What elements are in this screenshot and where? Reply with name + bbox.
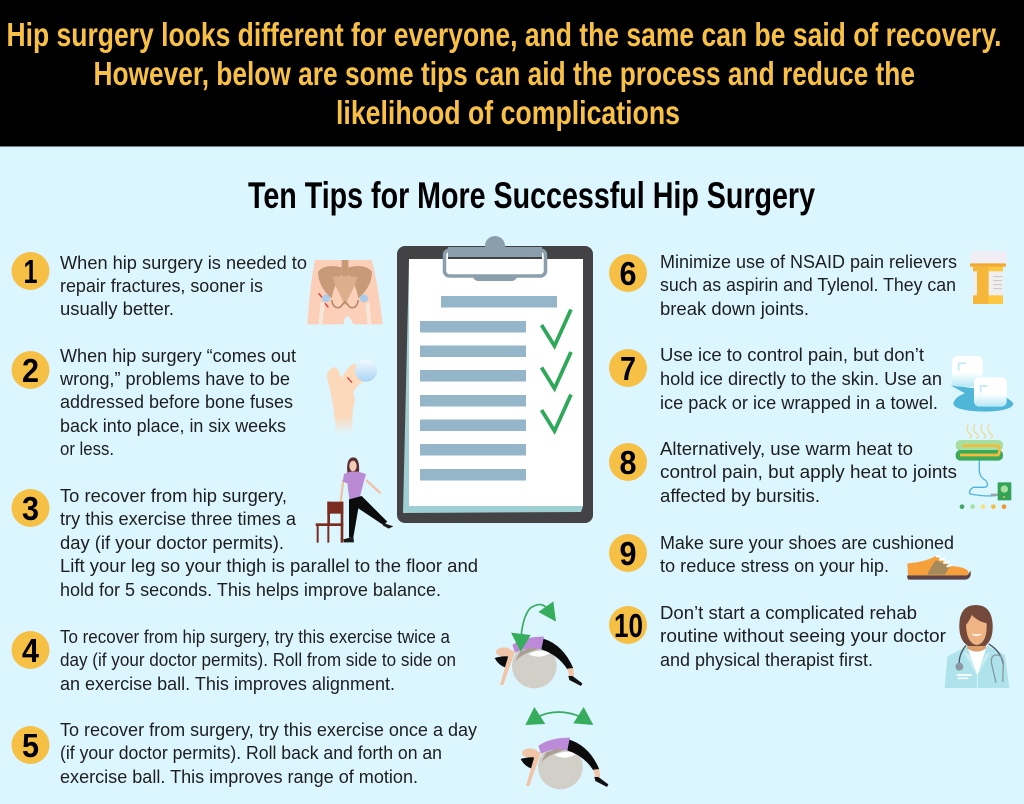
- title: Ten Tips for More Successful Hip Surgery: [248, 175, 815, 216]
- tip 4: 4: [22, 632, 40, 669]
- tip 2: or less.: [60, 439, 114, 459]
- tip 3: hold for 5 seconds. This helps improve balance.: [60, 580, 441, 600]
- icon: shoe: [907, 555, 971, 580]
- tip 2: 2: [22, 352, 39, 389]
- tip 4: [12, 627, 456, 694]
- double-headed green arrow: [525, 707, 593, 725]
- tip 5: (if your doctor permits). Roll back and forth on an: [60, 743, 442, 763]
- header banner: likelihood of complications: [336, 94, 680, 131]
- tip 8: control pain, but apply heat to joints: [660, 462, 957, 482]
- tip 1: repair fractures, sooner is: [60, 276, 263, 296]
- tip 10: routine without seeing your doctor: [660, 626, 946, 646]
- tip 2: When hip surgery “comes out: [60, 346, 296, 366]
- tip 3: Lift your leg so your thigh is parallel to the floor and: [60, 556, 478, 576]
- tip 7: 7: [620, 350, 636, 387]
- tip 4: To recover from hip surgery, try this exercise twice a: [60, 627, 451, 647]
- tip 1: When hip surgery is needed to: [60, 253, 307, 273]
- tip 4: an exercise ball. This improves alignment.: [60, 674, 395, 694]
- tip 5: To recover from surgery, try this exercise once a day: [60, 720, 477, 740]
- tip 2: addressed before bone fuses: [60, 392, 293, 412]
- tip 2: [12, 346, 296, 459]
- tip 1: usually better.: [60, 299, 174, 319]
- tip 10: and physical therapist first.: [660, 650, 873, 670]
- tip 3: try this exercise three times a: [60, 509, 297, 529]
- curved green arrow: [511, 601, 556, 652]
- tip 6: 6: [620, 255, 636, 292]
- tip 5: 5: [22, 727, 39, 764]
- tip 7: ice pack or ice wrapped in a towel.: [660, 393, 938, 413]
- icon: femur: [327, 360, 377, 434]
- tip 1: [12, 252, 307, 319]
- icon: woman with chair: [316, 457, 393, 543]
- tip 9: to reduce stress on your hip.: [660, 556, 889, 576]
- tip 9: 9: [620, 535, 636, 572]
- tip 1: 1: [24, 253, 38, 290]
- icon: heating pad: [956, 424, 1011, 509]
- tip 7: Use ice to control pain, but don’t: [660, 345, 924, 365]
- tip 8: affected by bursitis.: [660, 486, 820, 506]
- tip 10: [609, 603, 946, 670]
- tip 3: [12, 486, 478, 600]
- tip 9: Make sure your shoes are cushioned: [660, 533, 954, 553]
- icon: pill bottle: [970, 251, 1006, 304]
- tip 2: back into place, in six weeks: [60, 416, 286, 436]
- icon: doctor: [945, 605, 1009, 688]
- tip 6: Minimize use of NSAID pain relievers: [660, 252, 957, 272]
- tip 3: day (if your doctor permits).: [60, 533, 284, 553]
- tip 6: such as aspirin and Tylenol. They can: [660, 275, 956, 295]
- tip 3: 3: [22, 490, 39, 527]
- woman figure: [341, 457, 393, 542]
- icon: side-to-side exercise ball: [495, 601, 582, 688]
- clipboard illustration: [397, 236, 593, 523]
- tip 2: wrong,” problems have to be: [59, 369, 290, 389]
- tip 7: hold ice directly to the skin. Use an: [660, 369, 942, 389]
- green check marks: [542, 310, 571, 431]
- icon: ice cubes: [951, 356, 1013, 412]
- tip 10: 10: [614, 607, 643, 644]
- tip 6: break down joints.: [660, 299, 809, 319]
- tip 3: To recover from hip surgery,: [60, 486, 287, 506]
- icon: pelvis: [307, 260, 383, 324]
- tip 8: Alternatively, use warm heat to: [660, 439, 913, 459]
- header banner: [0, 0, 1024, 146]
- tip 6: [609, 252, 957, 319]
- checklist bars: [420, 296, 557, 480]
- chair: [316, 502, 343, 543]
- tip 9: [609, 533, 954, 576]
- tip 8: 8: [620, 444, 636, 481]
- tip 5: [12, 720, 477, 787]
- icon: back-and-forth exercise ball: [521, 707, 608, 789]
- tip 10: Don’t start a complicated rehab: [660, 603, 917, 623]
- tip 7: [609, 345, 942, 413]
- tip 5: exercise ball. This improves range of motion.: [60, 767, 418, 787]
- tip 4: day (if your doctor permits). Roll from side to side on: [60, 650, 456, 670]
- tip 8: [609, 439, 957, 506]
